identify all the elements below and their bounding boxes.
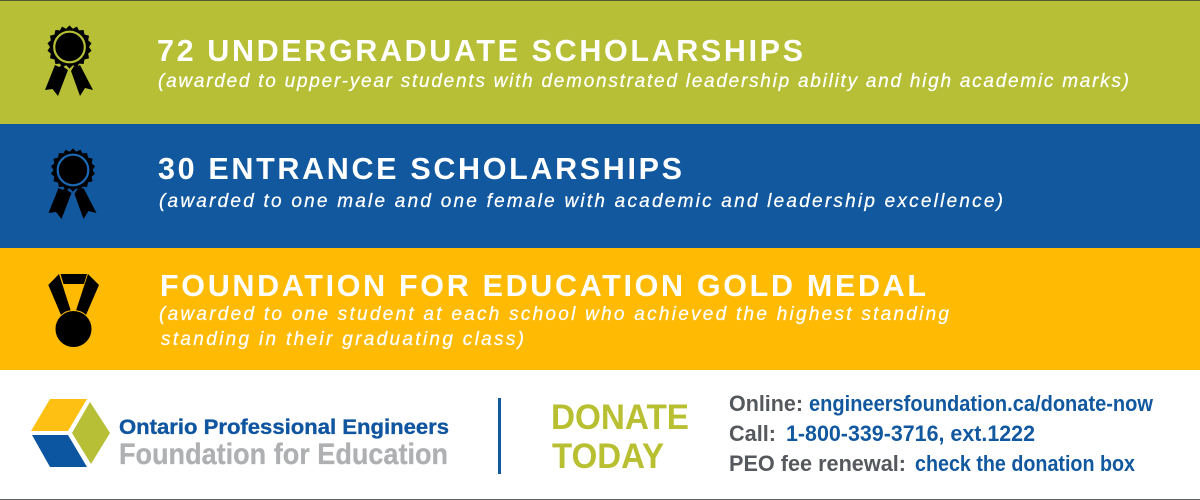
text: donation methods: PEO fee renewal: — [729, 451, 906, 476]
logo: organization name: Ontario Professional Engineers — [119, 415, 449, 439]
heading: 30 entrance scholarships: 30 ENTRANCE SCHOLARSHIPS — [158, 152, 682, 186]
panel: footer — [31, 391, 1154, 476]
heading: donate today: DONATE — [551, 398, 689, 437]
text: entrance description: (awarded to one male and one female with academic and leadership excellence) — [159, 191, 1003, 212]
icon: medal — [48, 274, 99, 348]
panel: entrance scholarships — [0, 124, 1200, 248]
panel: undergraduate scholarships — [0, 1, 1200, 124]
logo: hexagon cube mark — [31, 399, 110, 467]
text: gold medal description: standing in their graduating class) — [161, 329, 524, 350]
divider — [498, 398, 501, 474]
icon: ribbon award — [45, 25, 93, 96]
panel: gold medal — [0, 248, 1200, 370]
logo: organization name: Foundation for Education — [119, 438, 448, 471]
text: donation methods — [729, 391, 1154, 476]
heading: foundation gold medal: FOUNDATION FOR EDUCATION GOLD MEDAL — [160, 269, 926, 303]
text: donation methods: Call: — [729, 421, 776, 446]
text: undergraduate description: (awarded to upper-year students with demonstrated leadership ability and high academic marks) — [158, 71, 1129, 92]
heading: donate today — [551, 398, 689, 476]
heading: 72 undergraduate scholarships: 72 UNDERGRADUATE SCHOLARSHIPS — [157, 34, 803, 68]
icon: ribbon award — [48, 148, 96, 219]
text: donation methods: 1-800-339-3716, ext.1222 — [786, 421, 1035, 446]
text: donation methods: Online: — [729, 391, 803, 416]
text: gold medal description — [159, 304, 949, 350]
text: gold medal description: (awarded to one student at each school who achieved the highest standing — [159, 304, 949, 325]
text: donation methods: engineersfoundation.ca/donate-now — [809, 391, 1154, 416]
logo: organization name — [119, 415, 449, 471]
text: donation methods: check the donation box — [915, 451, 1136, 476]
heading: donate today: TODAY — [552, 437, 664, 476]
